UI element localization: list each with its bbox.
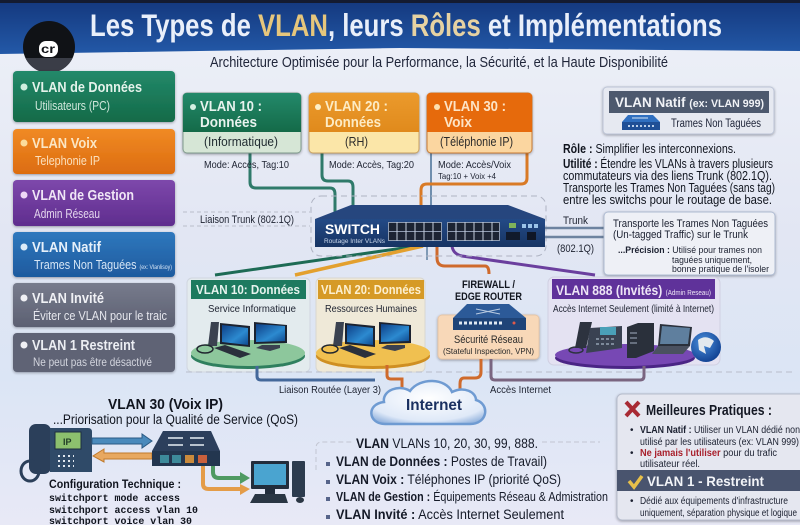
text block: rôle et utilité: commutateurs via des liens Trunk (802.1Q).: [563, 169, 772, 183]
icon: IP phone: [21, 424, 92, 481]
VLAN Natif card: [13, 232, 175, 277]
VLAN Voix card: [13, 129, 175, 174]
callout: trames non taguées: ...Précision : Utilisé pour trames non: [618, 245, 762, 256]
access mode labels: Mode: Accès/Voix: [438, 159, 512, 171]
panel: VLAN 888 invités: Accès Internet Seulement (limité à Internet): [553, 304, 714, 315]
panel: VLAN summary list: VLAN VLANs 10, 20, 30, 99, 888.: [356, 435, 538, 451]
panel: meilleures pratiques: Ne jamais l'utiliser pour du trafic: [640, 448, 777, 459]
yellow disk with workstations: [316, 322, 430, 369]
VLAN de Données card: [13, 71, 175, 122]
logo badge: cr: [41, 42, 55, 56]
icon: central switch: [315, 205, 545, 247]
heading: VLAN 30 QoS: ...Priorisation pour la Qualité de Service (QoS): [53, 412, 298, 427]
panel: VLAN summary list: VLAN de Gestion : Équipements Réseau & Admistration: [336, 489, 608, 504]
purple disk with devices: [555, 322, 721, 369]
callout: trames non taguées: bonne pratique de l'isoler: [672, 264, 769, 275]
title: Les Types de VLAN, leurs Rôles et Implémentations: [90, 7, 722, 43]
VLAN Invité card: Éviter ce VLAN pour le traic: [33, 308, 167, 323]
access mode labels: Tag:10 + Voix +4: [438, 172, 497, 181]
text block: rôle et utilité: entre les switchs pour le routage de base.: [563, 193, 772, 207]
card: VLAN 30: VLAN 30 :: [444, 98, 506, 115]
icon: central switch: SWITCH: [325, 222, 380, 237]
text block: rôle et utilité: Rôle : Simplifier les interconnexions.: [563, 142, 736, 156]
VLAN Invité card: [13, 283, 175, 327]
routed and internet cables: [257, 359, 644, 392]
card: VLAN 10: VLAN 10 :: [200, 98, 262, 115]
panel: meilleures pratiques: •: [630, 448, 634, 459]
VLAN Voix card: VLAN Voix: [32, 136, 97, 152]
callout: trames non taguées: taguées uniquement,: [672, 255, 752, 266]
callout: trames non taguées: Transporte les Trames Non Taguées: [613, 218, 768, 230]
card: VLAN 30: [427, 93, 532, 153]
VLAN de Gestion card: Admin Réseau: [34, 207, 100, 221]
heading: meilleures pratiques: Meilleures Pratiques :: [646, 403, 772, 419]
switch dashed enclosure: [311, 196, 546, 256]
panel: VLAN 20 zone: [316, 278, 430, 372]
card: VLAN 20: Données: [325, 114, 381, 131]
panel: meilleures pratiques: utilisateur réel.: [640, 459, 700, 470]
dashed zone divider: [186, 371, 795, 373]
panel: VLAN 10 zone: VLAN 10: Données: [196, 282, 300, 297]
VLAN de Gestion card: VLAN de Gestion: [32, 188, 134, 204]
icon: desktop PC: [250, 461, 305, 503]
text block: configuration technique: Configuration Technique :: [49, 477, 181, 491]
text block: configuration technique: switchport mode access: [49, 493, 180, 505]
trunk link to callout: Trunk: [563, 215, 588, 227]
trunk link to callout: [545, 215, 605, 255]
panel: VLAN summary list: VLAN Invité : Accès Internet Seulement: [336, 507, 564, 522]
panel: firewall / edge router: EDGE ROUTER: [455, 291, 522, 303]
panel: VLAN 20 zone: VLAN 20: Données: [321, 282, 421, 297]
icon: router: [453, 304, 526, 330]
VLAN de Gestion card: [13, 180, 175, 226]
panel: firewall / edge router: [438, 279, 539, 359]
panel: VLAN Natif: VLAN Natif (ex: VLAN 999): [615, 94, 764, 110]
trunk cables from access cards to switch: [250, 153, 527, 212]
heading: VLAN 30 QoS: VLAN 30 (Voix IP): [108, 396, 223, 413]
panel: meilleures pratiques: •: [630, 496, 634, 507]
VLAN de Données card: Utilisateurs (PC): [35, 99, 110, 113]
card: VLAN 10: Données: [200, 114, 257, 131]
VLAN Natif card: Trames Non Taguées (ex: Vlanlisoy): [34, 258, 172, 272]
card: VLAN 20: [309, 93, 419, 153]
callout: trames non taguées: (Un-tagged Traffic) sur le Trunk: [613, 229, 748, 241]
card: VLAN 20: VLAN 20 :: [325, 98, 388, 115]
cloud: Internet: [371, 381, 485, 424]
panel: firewall / edge router: FIREWALL /: [462, 279, 515, 291]
panel: VLAN summary list: VLAN Voix : Téléphones IP (priorité QoS): [336, 472, 561, 487]
panel: firewall / edge router: (Stateful Inspection, VPN): [443, 346, 534, 356]
panel: meilleures pratiques: [617, 394, 800, 520]
icon: central switch: Routage Inter VLANs: [324, 239, 385, 245]
header band: [0, 0, 800, 54]
panel: VLAN summary list: VLAN de Données : Postes de Travail): [336, 454, 547, 469]
panel: VLAN 888 invités: VLAN 888 (Invités) (Admin Reseau): [556, 283, 711, 298]
text block: configuration technique: [49, 477, 198, 525]
card: VLAN 20: (RH): [345, 135, 368, 149]
access mode labels: [204, 159, 512, 181]
panel: VLAN types list: [13, 71, 175, 372]
green disk with workstations: [191, 322, 305, 369]
icon: small QoS switch: [152, 431, 220, 466]
VLAN Natif card: VLAN Natif: [32, 240, 101, 256]
panel: VLAN Natif: Trames Non Taguées: [671, 118, 761, 130]
label: Liaison Trunk: Liaison Trunk (802.1Q): [200, 214, 294, 226]
panel: VLAN 10 zone: [187, 278, 310, 372]
VLAN 1 Restreint card: VLAN 1 Restreint: [32, 338, 135, 354]
VLAN de Données card: VLAN de Données: [32, 80, 142, 96]
panel: VLAN 20 zone: Ressources Humaines: [325, 303, 417, 315]
trunk link to callout: (802.1Q): [557, 243, 594, 255]
panel: VLAN 888 invités: [548, 277, 721, 369]
arrows: switch to PC: [203, 466, 250, 495]
cloud: Internet: Internet: [406, 397, 463, 414]
VLAN Voix card: Telephonie IP: [35, 154, 100, 168]
access mode labels: Mode: Accès, Tag:10: [204, 159, 289, 171]
panel: meilleures pratiques: VLAN 1 - Restreint: [647, 473, 764, 489]
panel: firewall / edge router: Sécurité Réseau: [454, 334, 523, 346]
access mode labels: Mode: Accès, Tag:20: [329, 159, 414, 171]
label: Liaison Routée: Liaison Routée (Layer 3): [279, 384, 381, 396]
icon: native switch: [622, 115, 660, 130]
subtitle: Architecture Optimisée pour la Performance, la Sécurité, et la Haute Disponibilité: [210, 54, 668, 71]
callout: trames non taguées: [604, 212, 775, 275]
heading: VLAN 30 QoS: [53, 396, 298, 427]
panel: VLAN 10 zone: Service Informatique: [208, 303, 296, 315]
panel: meilleures pratiques: •: [630, 425, 634, 436]
panel: VLAN Natif: [603, 87, 774, 134]
panel: VLAN summary list: [316, 435, 608, 522]
logo badge: [23, 21, 75, 73]
card: VLAN 30: (Téléphonie IP): [440, 135, 513, 149]
VLAN Invité card: VLAN Invité: [32, 291, 104, 307]
text block: rôle et utilité: [563, 142, 775, 207]
cables from switch to lower zones: [215, 246, 595, 275]
label: Accès Internet: Accès Internet: [490, 384, 551, 396]
VLAN 1 Restreint card: Ne peut pas être désactivé: [33, 355, 152, 369]
VLAN 1 Restreint card: [13, 333, 175, 372]
arrows: phone to switch: [92, 434, 152, 462]
icon: IP phone: IP: [63, 437, 72, 447]
card: VLAN 30: Voix: [444, 114, 473, 131]
icon: check mark: [629, 476, 642, 487]
icon: globe: [691, 332, 721, 362]
text block: configuration technique: switchport access vlan 10: [49, 505, 198, 517]
card: VLAN 10: [183, 93, 301, 153]
card: VLAN 10: (Informatique): [204, 135, 278, 149]
icon: red cross: [626, 402, 639, 416]
